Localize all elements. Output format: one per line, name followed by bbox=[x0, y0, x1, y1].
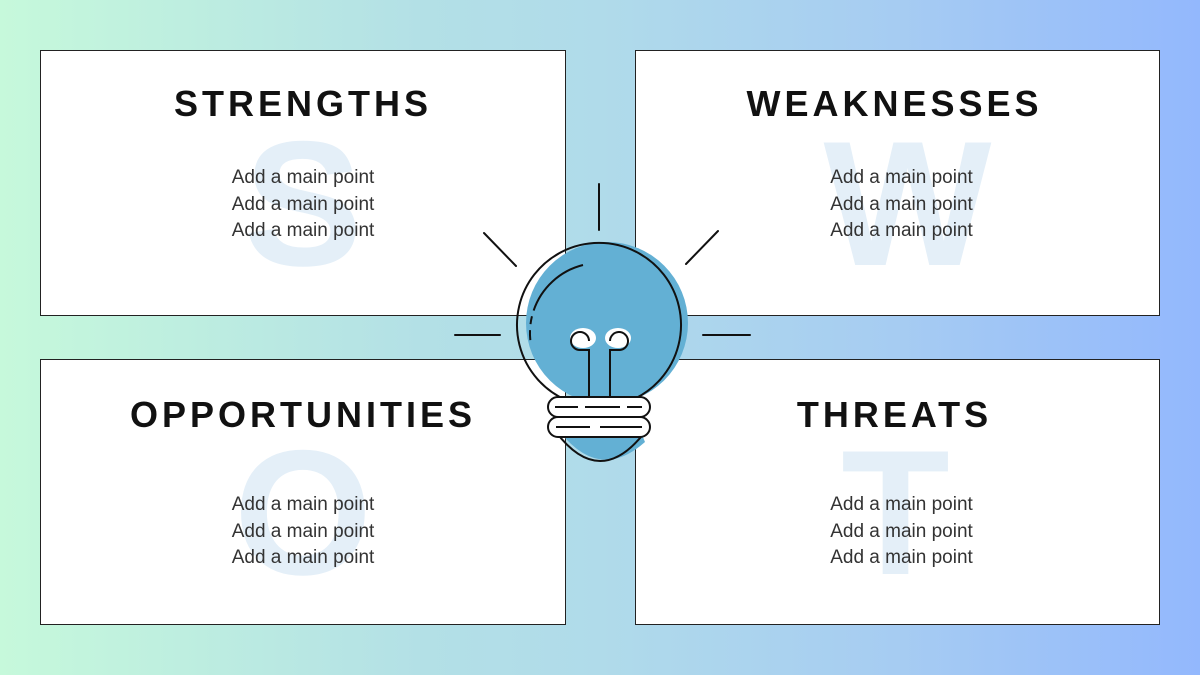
watermark S: S bbox=[244, 104, 362, 303]
text: weaknesses points: Add a main point bbox=[830, 167, 973, 188]
text: threats points bbox=[830, 494, 973, 568]
panel: threats bbox=[635, 359, 1160, 625]
heading: opportunities: OPPORTUNITIES bbox=[130, 394, 476, 435]
text: threats points: Add a main point bbox=[830, 520, 973, 542]
heading: strengths: STRENGTHS bbox=[174, 83, 432, 124]
text: threats points: Add a main point bbox=[830, 547, 973, 568]
heading: threats: THREATS bbox=[797, 394, 992, 435]
text: opportunities points bbox=[232, 494, 374, 568]
panel: opportunities bbox=[40, 359, 566, 625]
base bbox=[548, 397, 650, 417]
heading: weaknesses: WEAKNESSES bbox=[746, 83, 1043, 124]
text: opportunities points: Add a main point bbox=[232, 494, 374, 515]
bulb fill bbox=[526, 242, 688, 404]
text: weaknesses points: Add a main point bbox=[830, 220, 973, 241]
watermark O: O bbox=[234, 413, 372, 612]
text: opportunities points: Add a main point bbox=[232, 520, 374, 542]
text: strengths points: Add a main point bbox=[232, 167, 374, 188]
text: opportunities points: Add a main point bbox=[232, 547, 374, 568]
text: weaknesses points bbox=[830, 167, 973, 241]
text: strengths points bbox=[232, 167, 374, 241]
watermark T: T bbox=[841, 413, 950, 612]
panel: strengths bbox=[40, 50, 566, 316]
text: weaknesses points: Add a main point bbox=[830, 194, 973, 214]
filament bbox=[570, 328, 596, 348]
rays bbox=[598, 184, 600, 230]
watermark W: W bbox=[823, 104, 992, 303]
icon: light bulb bbox=[454, 183, 751, 462]
text: threats points: Add a main point bbox=[830, 494, 973, 515]
panel: weaknesses bbox=[635, 50, 1160, 316]
text: strengths points: Add a main point bbox=[232, 220, 374, 241]
text: strengths points: Add a main point bbox=[232, 194, 374, 214]
